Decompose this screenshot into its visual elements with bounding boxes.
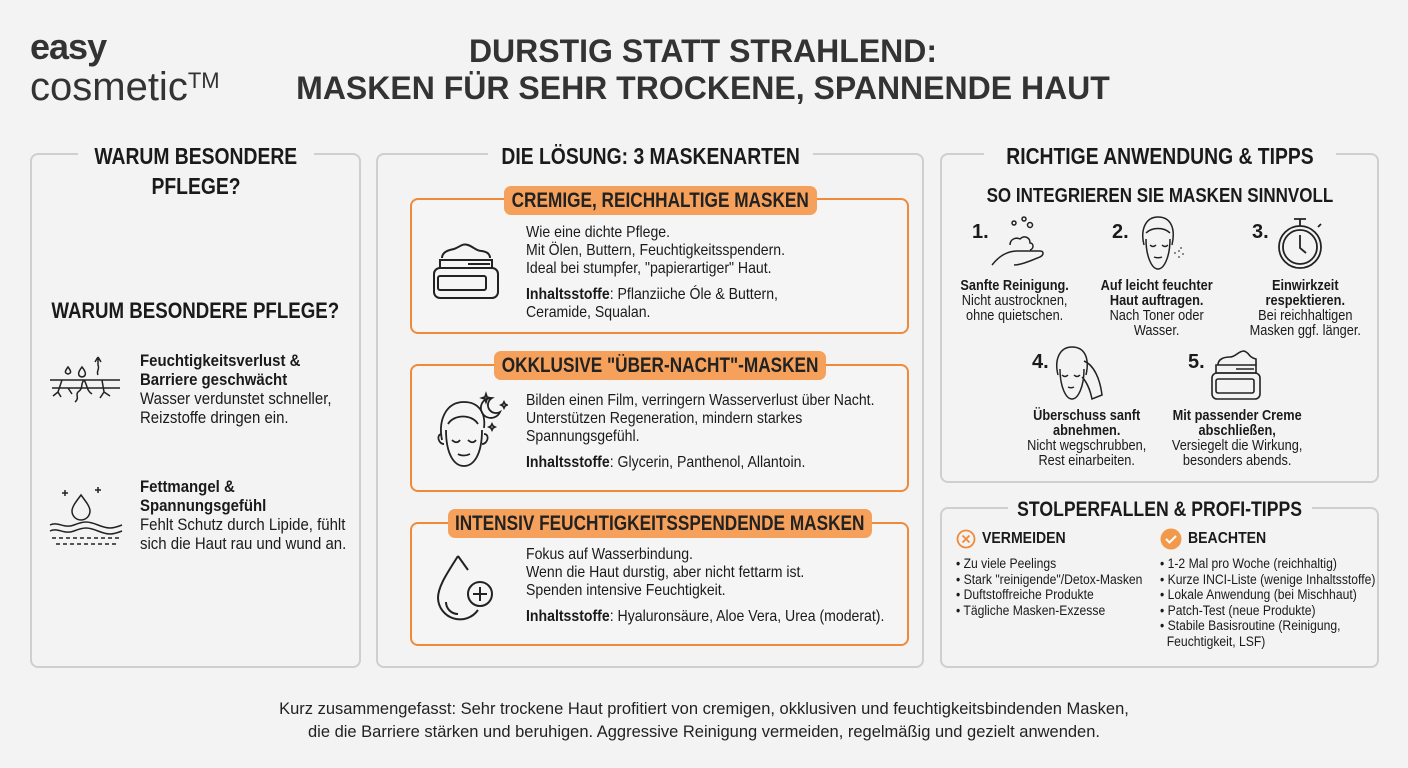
icon: x circle (956, 530, 976, 548)
step 2: 2. (1112, 221, 1129, 243)
text: feuchtigkeitsverlust: Feuchtigkeitsverlust & (140, 351, 300, 370)
text: Spenden intensive Feuchtigkeit. Inhaltsstoffe: Hyaluronsäure, Aloe Vera, Urea (moderat). (526, 582, 884, 625)
vermeiden column: • Zu viele Peelings (956, 556, 1056, 571)
text: feuchtigkeitsverlust: Reizstoffe dringen ein. (140, 408, 289, 427)
panel: richtige anwendung (940, 153, 1379, 483)
heading: RICHTIGE ANWENDUNG & TIPPS (1006, 143, 1314, 169)
step 3: 3. (1252, 221, 1269, 243)
logo: cosmeticTM (30, 65, 220, 109)
step 4: Überschuss sanft (1033, 408, 1141, 424)
icon: cream jar (433, 244, 499, 299)
step 1: ohne quietschen. (966, 308, 1063, 324)
text: fettmangel: sich die Haut rau und wund an. (140, 534, 346, 553)
text: Fokus auf Wasserbindung. (526, 546, 693, 563)
footer summary (279, 699, 1129, 741)
footer summary: Kurz zusammengefasst: Sehr trockene Haut profitiert von cremigen, okklusiven und feuchtigkeitsbindenden Masken, (279, 699, 1129, 718)
pill label: CREMIGE, REICHHALTIGE MASKEN (512, 189, 809, 212)
step 4: abnehmen. (1053, 423, 1121, 439)
subheading: SO INTEGRIEREN SIE MASKEN SINNVOLL (986, 185, 1333, 207)
text: Ideal bei stumpfer, "papierartiger" Haut. Inhaltsstoffe: Pflanziiche Óle & Buttern, (526, 260, 778, 303)
icon: stopwatch (1278, 218, 1322, 269)
text: fettmangel: Fettmangel & (140, 477, 235, 496)
icon: drop plus (437, 555, 493, 620)
beachten column: • Patch-Test (neue Produkte) (1160, 603, 1316, 618)
beachten column (1160, 528, 1375, 649)
heading: WARUM BESONDERE (95, 143, 297, 169)
step 1: 1. (972, 221, 989, 243)
text: feuchtigkeitsverlust: Wasser verdunstet schneller, (140, 389, 332, 408)
step 5: abschließen, (1198, 423, 1276, 439)
step 3: Masken ggf. länger. (1249, 323, 1361, 339)
heading: STOLPERFALLEN & PROFI-TIPPS (1018, 498, 1302, 521)
box: cremige masken (410, 198, 909, 334)
text: fettmangel: Fehlt Schutz durch Lipide, fühlt (140, 515, 345, 534)
step 2 (1101, 216, 1213, 339)
text: Wenn die Haut durstig, aber nicht fettarm ist. (526, 564, 804, 581)
heading: PFLEGE? (151, 173, 241, 199)
step 3: Bei reichhaltigen (1258, 308, 1352, 324)
step 3: respektieren. (1265, 293, 1345, 309)
heading: DIE LÖSUNG: 3 MASKENARTEN (501, 143, 800, 169)
vermeiden column: • Duftstoffreiche Produkte (956, 587, 1094, 602)
step 1 (960, 216, 1069, 324)
pill label: OKKLUSIVE "ÜBER-NACHT"-MASKEN (502, 354, 818, 377)
beachten column: • Stabile Basisroutine (Reinigung, (1160, 618, 1341, 633)
step 2: Wasser. (1134, 323, 1180, 339)
text: Bilden einen Film, verringern Wasserverlust über Nacht. (526, 392, 874, 409)
step 2: Nach Toner oder (1110, 308, 1204, 324)
footer summary: die die Barriere stärken und beruhigen. Aggressive Reinigung vermeiden, regelmäßig und gezielt anwenden. (308, 722, 1100, 741)
step 5: Mit passender Creme (1172, 408, 1302, 424)
beachten column: • Lokale Anwendung (bei Mischhaut) (1160, 587, 1357, 602)
vermeiden column: • Tägliche Masken-Exzesse (956, 603, 1105, 618)
step 3: Einwirkzeit (1272, 278, 1338, 294)
step 4: 4. (1032, 351, 1049, 373)
step 3 (1249, 218, 1361, 339)
panel: die lösung (376, 153, 924, 668)
icon: water drop waves (50, 487, 122, 545)
icon: hand foam (992, 216, 1044, 266)
step 1: Sanfte Reinigung. (960, 278, 1069, 294)
beachten column: BEACHTEN (1188, 530, 1266, 547)
title (296, 33, 1110, 106)
title: MASKEN FÜR SEHR TROCKENE, SPANNENDE HAUT (296, 70, 1110, 106)
heading (78, 141, 314, 201)
logo: easy (30, 26, 106, 67)
step 4: Nicht wegschrubben, (1027, 438, 1147, 454)
beachten column: • 1-2 Mal pro Woche (reichhaltig) (1160, 556, 1337, 571)
text: Unterstützen Regeneration, mindern starkes (526, 410, 802, 427)
step 2: Haut auftragen. (1110, 293, 1204, 309)
vermeiden column: • Stark "reinigende"/Detox-Masken (956, 572, 1142, 587)
text: fettmangel (140, 477, 346, 553)
text (526, 546, 884, 625)
step 4: Rest einarbeiten. (1039, 453, 1135, 469)
step 4 (1027, 346, 1147, 469)
step 5: Versiegelt die Wirkung, (1172, 438, 1302, 454)
box: okklusive masken (410, 364, 909, 492)
box: intensiv feuchtigkeitsspendende masken (410, 522, 909, 646)
logo (30, 26, 220, 109)
text: Spannungsgefühl. Inhaltsstoffe: Glycerin, Panthenol, Allantoin. (526, 428, 805, 471)
panel: warum besondere pflege (30, 153, 361, 668)
step 5 (1172, 350, 1302, 469)
text: feuchtigkeitsverlust: Barriere geschwächt (140, 370, 287, 389)
subheading: WARUM BESONDERE PFLEGE? (52, 298, 339, 323)
step 2: Auf leicht feuchter (1101, 278, 1213, 294)
vermeiden column (956, 530, 1142, 618)
text: feuchtigkeitsverlust (140, 351, 332, 427)
icon: cream jar (1211, 350, 1261, 400)
beachten column: • Kurze INCI-Liste (wenige Inhaltsstoffe) (1160, 572, 1375, 587)
icon: face spray (1142, 216, 1184, 270)
icon: check circle (1160, 528, 1182, 550)
pill label: INTENSIV FEUCHTIGKEITSSPENDENDE MASKEN (455, 512, 865, 535)
title: DURSTIG STATT STRAHLEND: (469, 33, 937, 69)
beachten column: Feuchtigkeit, LSF) (1167, 634, 1265, 649)
text: Wie eine dichte Pflege. (526, 224, 670, 241)
icon: face towel (1056, 346, 1103, 400)
panel: stolperfallen (940, 507, 1379, 668)
vermeiden column: VERMEIDEN (982, 530, 1066, 547)
text: fettmangel: Spannungsgefühl (140, 496, 266, 515)
text: Ceramide, Squalan. (526, 304, 650, 321)
text: Mit Ölen, Buttern, Feuchtigkeitsspendern. (526, 242, 785, 259)
icon: cracked skin (50, 356, 120, 403)
text (526, 392, 874, 471)
step 5: besonders abends. (1183, 453, 1291, 469)
step 1: Nicht austrocknen, (962, 293, 1067, 309)
text (526, 224, 785, 321)
step 5: 5. (1188, 351, 1205, 373)
icon: face moon (438, 391, 508, 467)
